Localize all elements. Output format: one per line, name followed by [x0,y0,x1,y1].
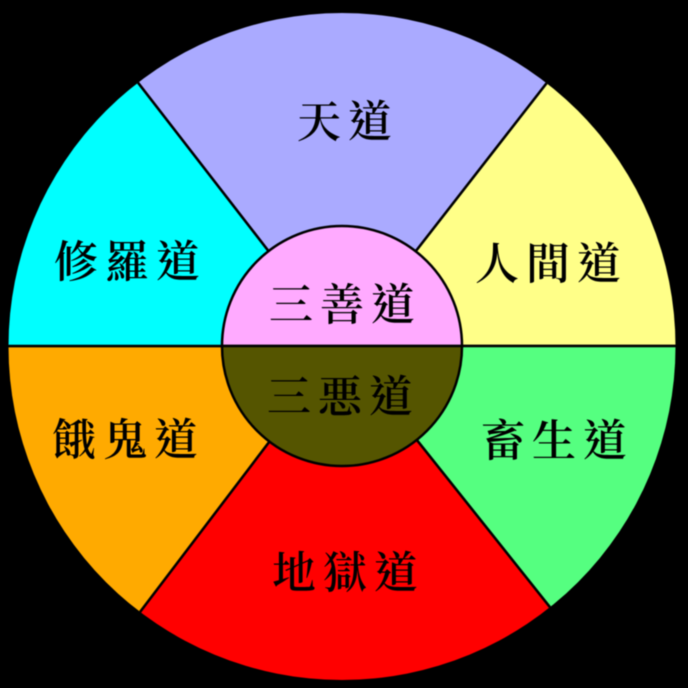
label: asura realm: 修羅道 [54,238,207,287]
label: heavenly realm: 天道 [297,98,399,147]
panel: hungry ghost realm segment [8,346,270,613]
panel: hell realm segment [140,440,551,681]
label: hungry ghost realm: 餓鬼道 [52,416,205,465]
panel: asura realm segment [8,82,269,348]
panel: heavenly realm segment [138,12,546,250]
label: animal realm: 畜生道 [481,417,634,466]
panel: animal realm segment [418,344,676,607]
label: human realm: 人間道 [475,240,628,289]
label: hell realm: 地獄道 [272,549,425,598]
label: three evil realms: 三悪道 [267,373,420,422]
panel: three evil realms lower semicircle [222,346,462,466]
label: three good realms: 三善道 [269,281,422,330]
panel: human realm segment [416,82,676,346]
panel: three good realms upper semicircle [222,226,462,346]
